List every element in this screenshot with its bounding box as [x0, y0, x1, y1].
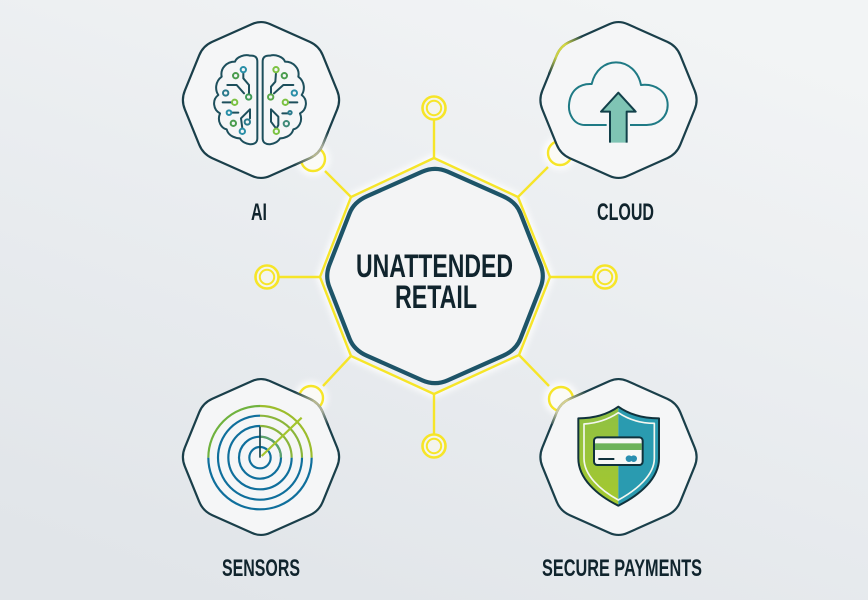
node: top	[422, 96, 446, 120]
label: cloud: CLOUD	[597, 199, 654, 226]
node: corner rings	[299, 141, 573, 411]
heading: unattended retail: RETAIL	[395, 279, 477, 315]
icon: brain	[214, 55, 306, 144]
panel: AI	[183, 22, 339, 226]
icon: shield with card	[578, 407, 659, 506]
node: bottom	[422, 434, 446, 458]
heading: unattended retail	[356, 248, 513, 315]
heading: unattended retail: UNATTENDED	[356, 248, 513, 284]
panel: central octagon	[320, 158, 550, 394]
panel: cloud	[540, 22, 697, 226]
node: left	[256, 266, 278, 288]
icon: radar	[208, 406, 312, 509]
connector network	[256, 96, 616, 458]
panel: secure payments	[540, 379, 702, 582]
panel: sensors	[183, 379, 339, 582]
label: sensors: SENSORS	[222, 555, 300, 582]
label: AI: AI	[251, 199, 267, 226]
icon: cloud upload	[569, 62, 668, 143]
node: right	[594, 266, 616, 288]
label: secure payments: SECURE PAYMENTS	[542, 555, 702, 582]
